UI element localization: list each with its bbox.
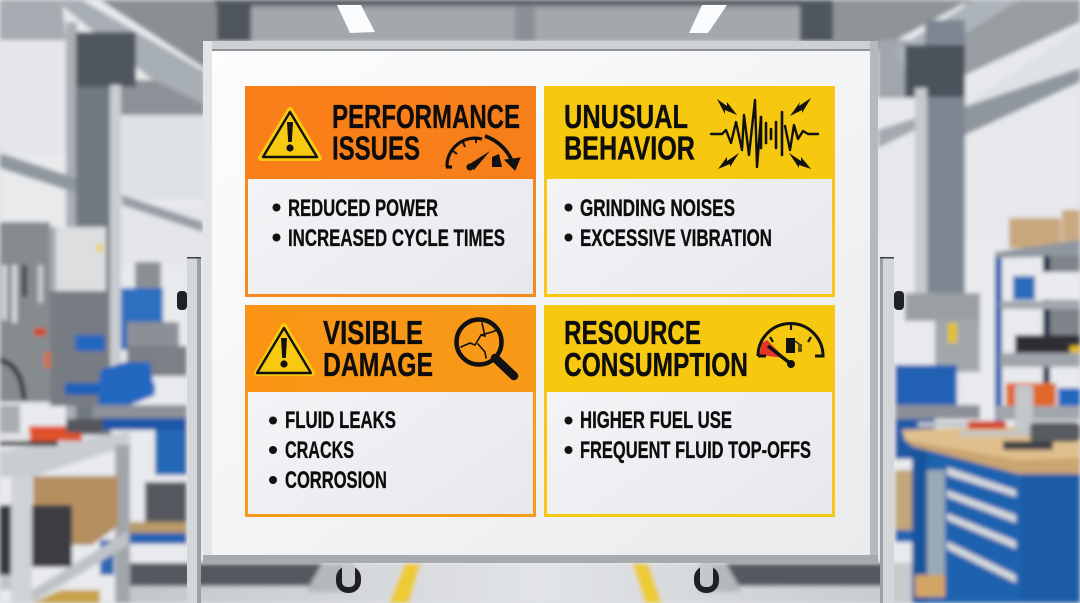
whiteboard: [203, 41, 878, 563]
heading: resource consumption: RESOURCE: [564, 314, 701, 351]
left wall and beams: [0, 0, 215, 435]
bullet list: performance issues: REDUCED POWER: [288, 195, 438, 222]
right foreground workbench: [902, 385, 1080, 603]
stand post: left: [177, 257, 201, 603]
bullet list: unusual behavior: [564, 195, 772, 252]
heading: resource consumption: CONSUMPTION: [564, 346, 748, 383]
icon: vibration waveform: [711, 98, 818, 169]
panel: unusual behavior: [544, 86, 835, 297]
icon: warning triangle: [257, 326, 312, 373]
panel: performance issues: [245, 86, 536, 297]
caster: left: [336, 563, 361, 593]
heading: visible damage: DAMAGE: [323, 346, 433, 383]
bullet list: unusual behavior: GRINDING NOISES: [580, 195, 735, 222]
heading: performance issues: ISSUES: [332, 130, 420, 166]
icon: fuel gauge: [758, 323, 823, 368]
heading: unusual behavior: UNUSUAL: [564, 98, 688, 135]
bullet list: visible damage: FLUID LEAKS: [285, 407, 396, 434]
icon: speedometer with down arrow: [446, 136, 520, 170]
icon: magnifier over crack: [456, 320, 514, 376]
ceiling light: right: [689, 5, 727, 33]
panel: visible damage: [245, 305, 536, 517]
icon: warning triangle: [261, 110, 319, 158]
bullet list: performance issues: [272, 195, 505, 252]
heading: unusual behavior: [564, 98, 695, 166]
heading: unusual behavior: BEHAVIOR: [564, 130, 695, 166]
bullet list: resource consumption: HIGHER FUEL USE: [580, 407, 732, 434]
floor: [130, 563, 950, 603]
heading: performance issues: [332, 98, 520, 166]
heading: visible damage: [323, 314, 433, 383]
bullet list: resource consumption: [564, 407, 811, 464]
bullet list: visible damage: CORROSION: [285, 467, 387, 494]
ceiling light: left: [337, 5, 375, 33]
bullet list: visible damage: [269, 407, 396, 494]
ceiling area: [210, 0, 840, 42]
left foreground shelf: [0, 419, 130, 603]
right shelving and boxes: [995, 210, 1080, 423]
bullet list: resource consumption: FREQUENT FLUID TOP-OFFS: [580, 437, 811, 464]
bullet list: unusual behavior: EXCESSIVE VIBRATION: [580, 225, 772, 252]
heading: visible damage: VISIBLE: [323, 314, 423, 351]
heading: performance issues: PERFORMANCE: [332, 98, 520, 135]
panel: resource consumption: [544, 305, 835, 517]
bullet list: visible damage: CRACKS: [285, 437, 354, 464]
right wall, column and ceiling: [833, 0, 1080, 295]
left pegboard and tools: [0, 222, 110, 435]
left blue machine and vise: [65, 262, 187, 575]
stand post: right: [880, 257, 904, 603]
right grey machine and vise: [895, 293, 980, 542]
caster: right: [694, 563, 719, 593]
heading: resource consumption: [564, 314, 748, 383]
bullet list: performance issues: INCREASED CYCLE TIMES: [288, 225, 505, 252]
